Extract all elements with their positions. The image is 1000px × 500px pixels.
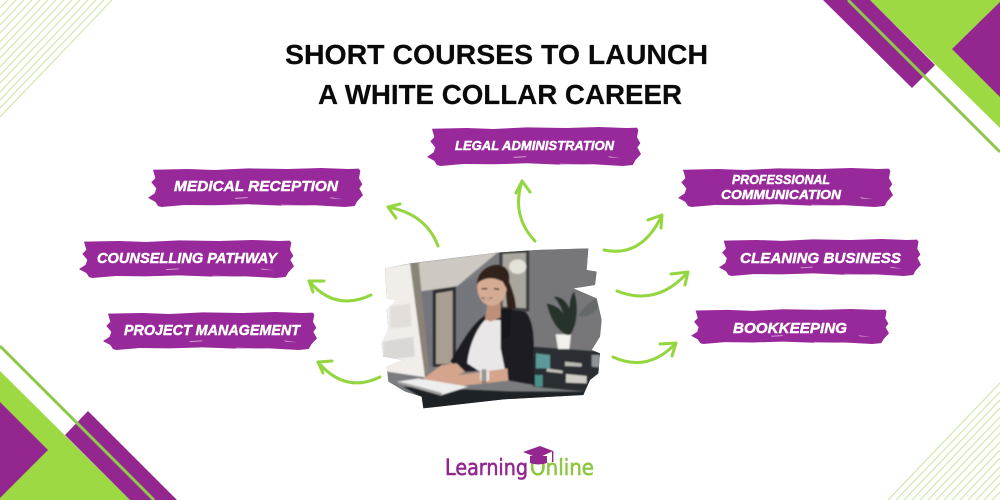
- arrow: to cleaning business: [617, 272, 688, 296]
- photo: woman working at computer: [380, 247, 607, 410]
- arrow: to project management: [318, 361, 380, 383]
- arrow: to bookkeeping: [613, 343, 676, 363]
- label: project management: [103, 312, 317, 350]
- logo: Learning Online: Learning: [445, 456, 528, 481]
- label: medical reception: MEDICAL RECEPTION: [174, 178, 339, 195]
- label: bookkeeping: [691, 309, 889, 344]
- label: legal administration: [427, 127, 641, 166]
- icon: graduation cap: [523, 446, 553, 464]
- arrow: to medical reception: [388, 204, 438, 246]
- logo: Learning Online: Online: [530, 456, 594, 481]
- label: cleaning business: CLEANING BUSINESS: [740, 250, 901, 267]
- decoration: bottom-left corner shapes: [0, 346, 177, 500]
- label: professional communication: COMMUNICATION: [721, 188, 842, 202]
- decoration: top-right corner shapes: [823, 0, 1000, 152]
- decoration: top-left hatch: [0, 0, 112, 117]
- title: SHORT COURSES TO LAUNCH: [285, 39, 708, 70]
- label: cleaning business: [719, 239, 921, 276]
- label: counselling pathway: [79, 240, 294, 278]
- arrow: to counselling pathway: [309, 281, 371, 301]
- label: medical reception: [148, 168, 363, 207]
- title: A WHITE COLLAR CAREER: [318, 79, 682, 110]
- label: legal administration: LEGAL ADMINISTRATION: [455, 138, 615, 153]
- logo: Learning Online: [445, 446, 594, 481]
- label: bookkeeping: BOOKKEEPING: [733, 320, 847, 337]
- label: counselling pathway: COUNSELLING PATHWAY: [97, 251, 278, 267]
- label: professional communication: [678, 168, 893, 207]
- arrow: to professional communication: [604, 215, 662, 251]
- label: professional communication: PROFESSIONAL: [732, 173, 830, 187]
- title: [285, 39, 708, 110]
- arrow: to legal administration: [516, 181, 535, 241]
- decoration: bottom-right hatch: [888, 383, 1000, 500]
- label: project management: PROJECT MANAGEMENT: [124, 323, 301, 339]
